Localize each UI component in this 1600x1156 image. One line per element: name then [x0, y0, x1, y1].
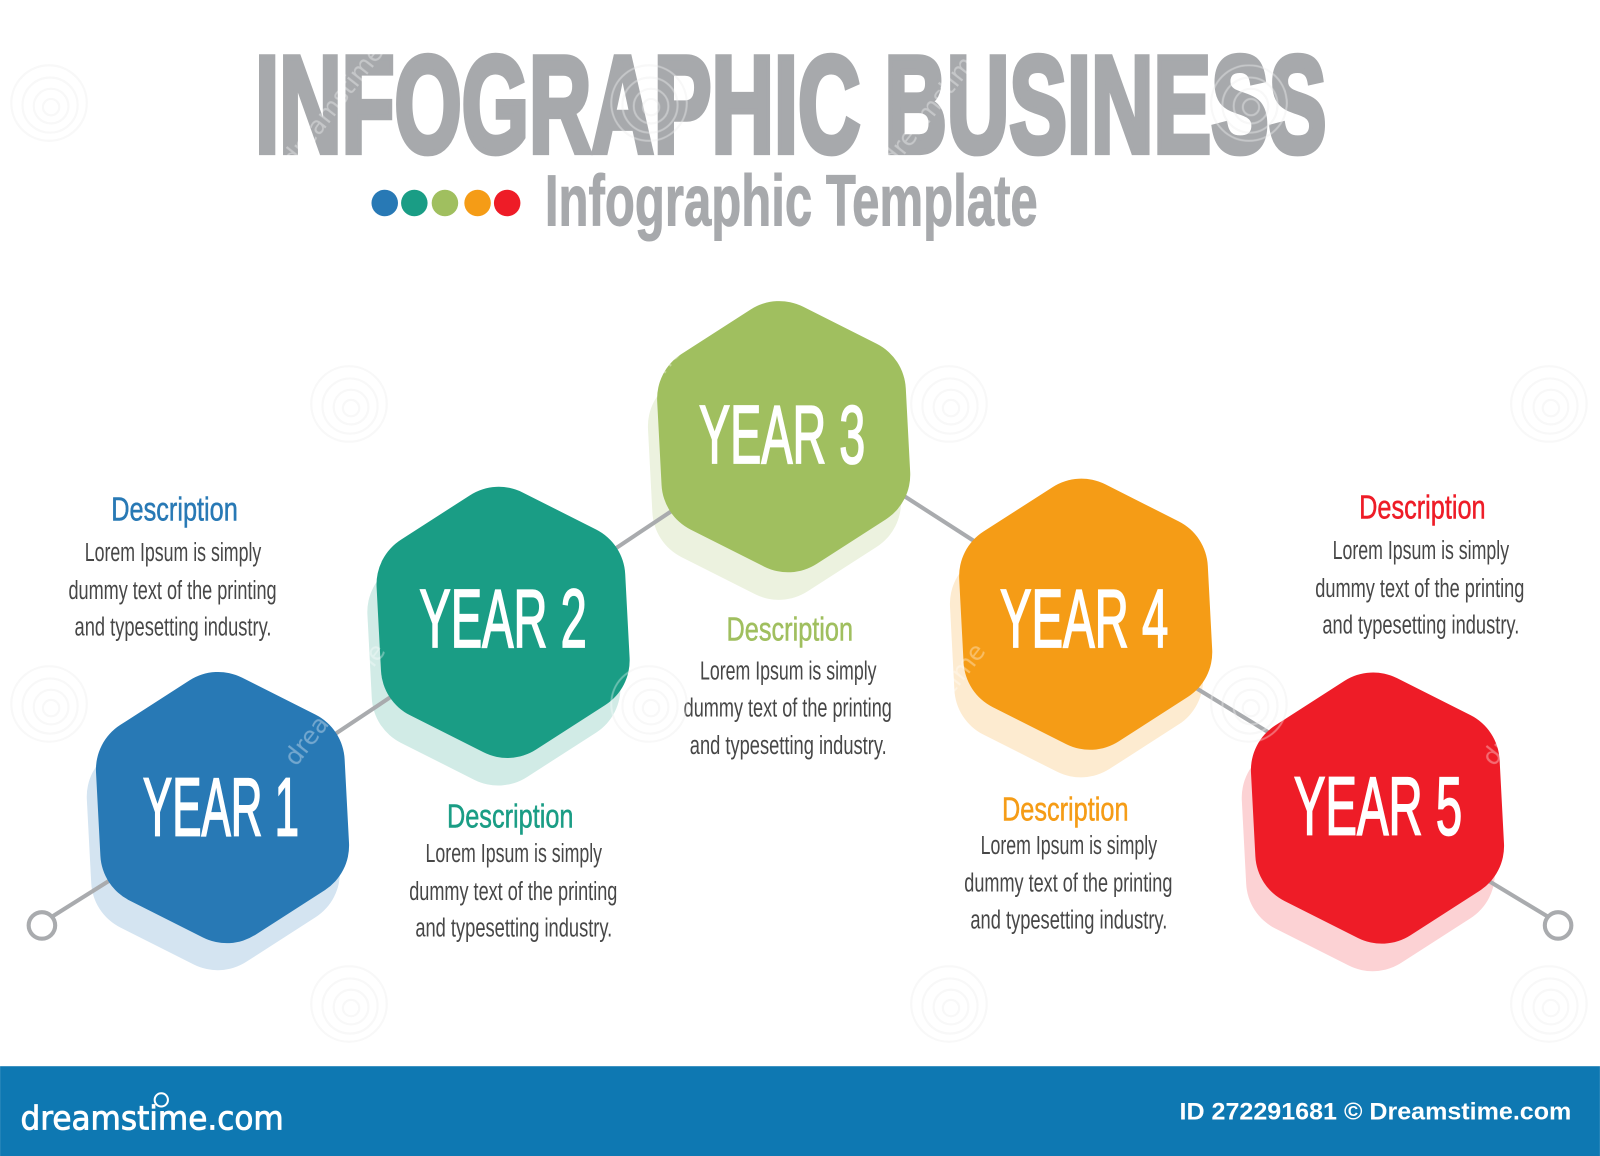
- hexagon shadows: [138, 378, 1444, 922]
- description: year 1: and typesetting industry.: [75, 614, 271, 642]
- description: year 5: dummy text of the printing: [1315, 575, 1524, 603]
- hexagon: year 1: YEAR 1: [143, 761, 299, 854]
- description: year 5: and typesetting industry.: [1322, 612, 1519, 640]
- hexagon: year 4: [1000, 528, 1168, 700]
- hexagon: year 2: [419, 536, 587, 709]
- description: year 5: [1315, 489, 1524, 640]
- description: year 2: and typesetting industry.: [415, 915, 612, 943]
- colour dots: [371, 190, 520, 216]
- description: year 1: Lorem Ipsum is simply: [85, 539, 261, 567]
- description: year 4: and typesetting industry.: [970, 906, 1167, 934]
- description: year 1: [68, 491, 277, 642]
- description: year 1: Description: [111, 491, 238, 528]
- description: year 2: Lorem Ipsum is simply: [426, 840, 602, 868]
- description: year 2: Description: [447, 798, 573, 835]
- description: year 3: [684, 612, 892, 760]
- description: year 3: Description: [727, 612, 853, 649]
- watermark overlay: dreamstime: [878, 637, 991, 771]
- description: year 2: [409, 798, 617, 943]
- subtitle: Infographic Template: [545, 160, 1038, 241]
- hexagon: year 1: [143, 721, 299, 894]
- watermark overlay: dreamstime: [876, 38, 989, 172]
- hexagon: year 2: YEAR 2: [419, 572, 587, 665]
- hexagon: year 5: [1294, 722, 1462, 894]
- watermark overlay: dreamstime: [1476, 637, 1589, 771]
- description: year 4: dummy text of the printing: [964, 870, 1172, 898]
- watermark overlay: dreamstime: [574, 337, 687, 471]
- footer image id: ID 272291681 © Dreamstime.com: [1180, 1098, 1571, 1125]
- description: year 3: Lorem Ipsum is simply: [700, 658, 877, 686]
- description: year 2: dummy text of the printing: [409, 878, 617, 906]
- hexagon: year 5: YEAR 5: [1294, 760, 1462, 853]
- description: year 3: dummy text of the printing: [684, 694, 892, 722]
- watermark overlay: dreamstime: [1476, 38, 1589, 172]
- description: year 4: Lorem Ipsum is simply: [981, 832, 1157, 860]
- connector line: [29, 489, 1571, 939]
- hexagon: year 3: YEAR 3: [699, 388, 865, 481]
- description: year 1: dummy text of the printing: [68, 577, 277, 605]
- description: year 3: and typesetting industry.: [690, 732, 887, 760]
- watermark overlay: dreamstime: [276, 38, 389, 172]
- footer logo: dreamstime.com: [20, 1099, 284, 1137]
- description: year 4: [964, 791, 1172, 934]
- description: year 4: Description: [1002, 791, 1129, 828]
- hexagon: year 3: [699, 350, 865, 523]
- description: year 5: Lorem Ipsum is simply: [1333, 537, 1509, 565]
- hexagon: year 4: YEAR 4: [1000, 572, 1168, 665]
- description: year 5: Description: [1359, 489, 1486, 526]
- watermark overlay: dreamstime: [278, 637, 391, 771]
- footer band: [0, 1066, 1600, 1156]
